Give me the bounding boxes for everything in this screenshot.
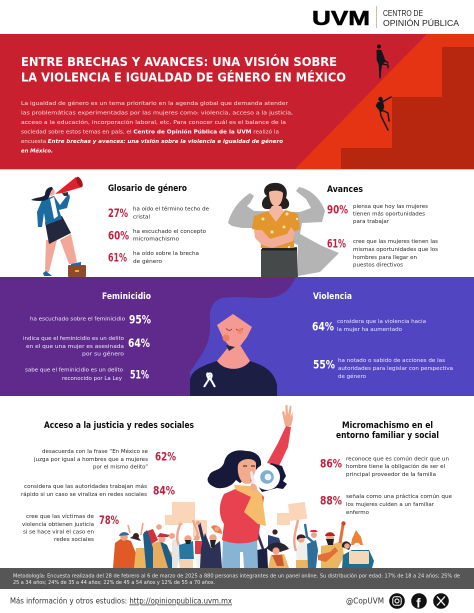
panel: glosario de género: de género xyxy=(133,258,163,265)
methodology bar xyxy=(0,568,474,589)
panel: violencia: ha notado o sabido de acciones de las xyxy=(338,358,445,364)
crowd right xyxy=(256,548,268,568)
panel: avances: tienen más oportunidades xyxy=(353,210,425,218)
panel: glosario de género: ha oído sobre la brecha xyxy=(133,250,199,257)
icon: instagram xyxy=(389,593,405,609)
panel: feminicidio: 64% xyxy=(128,336,150,350)
panel: feminicidio: indica que el feminicidio es un delito xyxy=(23,336,125,342)
panel: violencia: Violencia xyxy=(313,292,352,302)
panel: acceso a la justicia y redes sociales: considera que las autoridades trabajan más xyxy=(24,483,147,490)
panel: violencia xyxy=(312,292,453,380)
logo: UVM Centro de Opinión Pública: CENTRO DE xyxy=(383,8,423,18)
panel: acceso a la justicia y redes sociales: rápido si un caso se viraliza en redes sociales xyxy=(21,491,147,498)
panel: feminicidio: 95% xyxy=(129,312,151,326)
panel: feminicidio: ha escuchado sobre el feminicidio xyxy=(30,316,126,322)
panel: glosario de género xyxy=(108,183,210,265)
panel: acceso a la justicia y redes sociales: Acceso a la justicia y redes sociales xyxy=(44,421,194,431)
illustration: central woman with megaphone xyxy=(208,405,293,568)
panel: acceso a la justicia y redes sociales: juzga por igual a hombres que a mujeres xyxy=(33,457,148,463)
methodology bar: Metodología: Encuesta realizada del 28 de febrero al 6 de marzo de 2025 a 880 personas integrantes de un panel online. Su distribución por edad: 17% de 18 a 24 años; 25% de xyxy=(13,572,460,580)
panel: violencia: considera que la violencia hacia xyxy=(337,319,426,325)
panel: micromachismo en el entorno familiar y social: hombre tiene la obligación de ser el xyxy=(346,463,445,470)
panel: acceso a la justicia y redes sociales: redes sociales xyxy=(54,537,94,543)
intro paragraph: acceso a la educación, incorporación laboral, etc. Para conocer cuál es el balance de la xyxy=(21,119,286,126)
panel: violencia: la mujer ha aumentado xyxy=(337,327,403,333)
panel: glosario de género: 27% xyxy=(108,206,128,220)
panel: feminicidio: sabe que el feminicidio es un delito xyxy=(25,368,124,374)
panel: micromachismo en el entorno familiar y social: reconoce que es común decir que un xyxy=(346,456,450,462)
panel: micromachismo en el entorno familiar y social: entorno familiar y social xyxy=(336,431,439,441)
footer social handle and icons: @CopUVM xyxy=(346,596,384,606)
panel: glosario de género: 61% xyxy=(108,250,127,264)
panel: avances: 61% xyxy=(327,236,346,250)
panel: glosario de género: cristal xyxy=(133,214,150,220)
logo: UVM Centro de Opinión Pública: UVM xyxy=(312,8,370,30)
panel: feminicidio xyxy=(23,292,151,382)
illustration: woman with white ribbon xyxy=(190,314,277,396)
panel: feminicidio: Feminicidio xyxy=(102,292,151,302)
panel: avances: puestos directivos xyxy=(353,262,403,268)
icon: x xyxy=(433,593,449,609)
panel: avances: mismas oportunidades que los xyxy=(353,247,438,253)
icon: facebook: f xyxy=(416,596,421,610)
icon: white ribbon xyxy=(204,373,215,387)
footer link: Más información y otros estudios: http://opinionpublica.uvm.mx xyxy=(10,596,232,606)
panel: glosario de género: Glosario de género xyxy=(108,183,187,194)
panel: purple and blue band xyxy=(0,277,474,396)
panel: avances: cree que las mujeres tienen las xyxy=(353,239,438,245)
logo: UVM Centro de Opinión Pública xyxy=(312,6,459,30)
panel: acceso a la justicia y redes sociales: desacuerda con la frase “En México se xyxy=(42,448,149,455)
panel: feminicidio: reconocido por La Ley xyxy=(62,376,123,382)
intro paragraph: en México. xyxy=(21,148,53,154)
panel: acceso a la justicia y redes sociales: si se hace viral el caso en xyxy=(23,530,95,536)
panel: acceso a la justicia y redes sociales: cree que las víctimas de xyxy=(26,513,95,520)
title: ENTRE BRECHAS Y AVANCES: UNA VISIÓN SOBRE xyxy=(21,54,337,69)
panel: micromachismo en el entorno familiar y social: señala como una práctica común que xyxy=(346,493,453,500)
panel: micromachismo en el entorno familiar y social: 86% xyxy=(320,456,342,470)
crowd left xyxy=(113,538,137,568)
footer social handle and icons xyxy=(346,593,449,610)
panel: micromachismo en el entorno familiar y social xyxy=(320,421,453,516)
panel: avances: piensa que hoy las mujeres xyxy=(353,204,428,210)
panel: violencia: 64% xyxy=(312,319,334,333)
methodology bar: 25 a 34 años; 24% de 35 a 44 años; 22% de 45 a 54 años y 12% de 55 a 70 años. xyxy=(13,580,215,586)
panel: glosario de género: micromachismo xyxy=(133,236,180,242)
panel: micromachismo en el entorno familiar y social: enfermo xyxy=(346,510,370,516)
illustration: protest crowd xyxy=(113,502,374,568)
icon: climbing figure lower xyxy=(376,97,391,130)
panel: header banner xyxy=(0,34,474,170)
logo: UVM Centro de Opinión Pública: OPINIÓN PÚBLICA xyxy=(383,18,459,28)
panel: avances: para trabajar xyxy=(353,219,390,225)
panel: feminicidio: por su género xyxy=(82,350,125,358)
panel: glosario de género: 60% xyxy=(108,228,129,242)
panel: micromachismo en el entorno familiar y social: principal proveedor de la familia xyxy=(346,472,436,478)
panel: acceso a la justicia y redes sociales xyxy=(21,421,194,543)
panel: glosario de género: ha escuchado el concepto xyxy=(133,229,207,235)
panel: micromachismo en el entorno familiar y social: los mujeres cuiden a un familiar xyxy=(346,502,435,508)
illustration: woman with megaphone on briefcase xyxy=(31,176,86,277)
panel: glosario de género: ha oído el término techo de xyxy=(133,206,210,212)
panel: feminicidio: 51% xyxy=(130,367,149,381)
panel: avances: 90% xyxy=(327,202,348,216)
intro paragraph: sociedad sobre estos temas en país, el Centro de Opinión Pública de la UVM realizó la xyxy=(21,128,279,136)
panel: micromachismo en el entorno familiar y social: 88% xyxy=(320,493,342,507)
panel: violencia: autoridades para legislar con perspectiva xyxy=(338,366,453,372)
panel: acceso a la justicia y redes sociales: violencia obtienen justicia xyxy=(22,522,94,528)
title: LA VIOLENCIA E IGUALDAD DE GÉNERO EN MÉXICO xyxy=(21,70,346,84)
title xyxy=(21,54,346,84)
icon: climbing figure upper xyxy=(377,44,388,78)
illustration: woman with superhero shadow xyxy=(228,183,339,277)
panel: acceso a la justicia y redes sociales: por el mismo delito” xyxy=(93,464,148,470)
panel: micromachismo en el entorno familiar y social: Micromachismo en el xyxy=(342,421,433,431)
panel: avances: Avances xyxy=(327,185,363,195)
panel: acceso a la justicia y redes sociales: 62% xyxy=(155,449,176,463)
intro paragraph: las problemáticas experimentadas por las mujeres como: violencia, acceso a la justicia, xyxy=(21,110,293,116)
icon: megaphone xyxy=(250,463,287,492)
panel: avances: hombres para llegar en xyxy=(353,255,418,261)
intro paragraph: encuesta Entre brechas y avances: una visión sobre la violencia e igualdad de género xyxy=(21,138,283,145)
panel: acceso a la justicia y redes sociales: 84% xyxy=(153,483,175,497)
intro paragraph: La igualdad de género es un tema prioritario en la agenda global que demanda atender xyxy=(21,100,289,107)
panel: avances xyxy=(327,185,438,268)
intro paragraph xyxy=(21,100,293,154)
panel: violencia: 55% xyxy=(313,357,335,371)
panel: feminicidio: en el que una mujer es asesinada xyxy=(26,344,124,350)
panel: violencia: de género xyxy=(338,373,367,380)
panel: acceso a la justicia y redes sociales: 78% xyxy=(99,513,119,527)
